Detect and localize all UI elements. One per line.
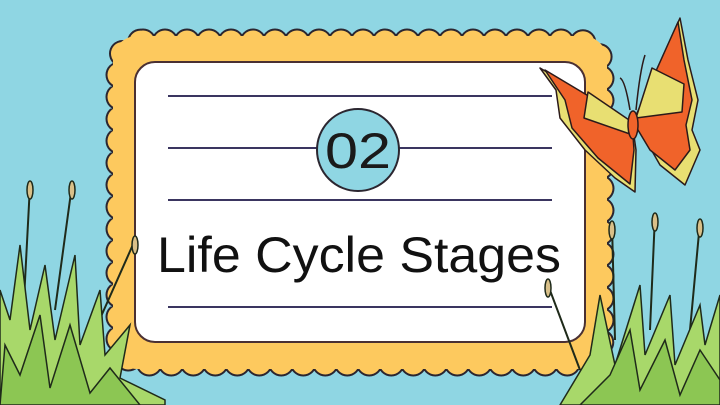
grass right xyxy=(545,213,720,405)
white card xyxy=(135,62,585,342)
title: Life Cycle Stages xyxy=(157,227,561,283)
ruled lines xyxy=(168,96,552,307)
grass left xyxy=(0,181,165,405)
butterfly xyxy=(540,18,700,192)
frame: scalloped yellow border xyxy=(113,36,607,369)
number badge: 02 xyxy=(325,123,391,179)
number badge xyxy=(317,109,399,191)
